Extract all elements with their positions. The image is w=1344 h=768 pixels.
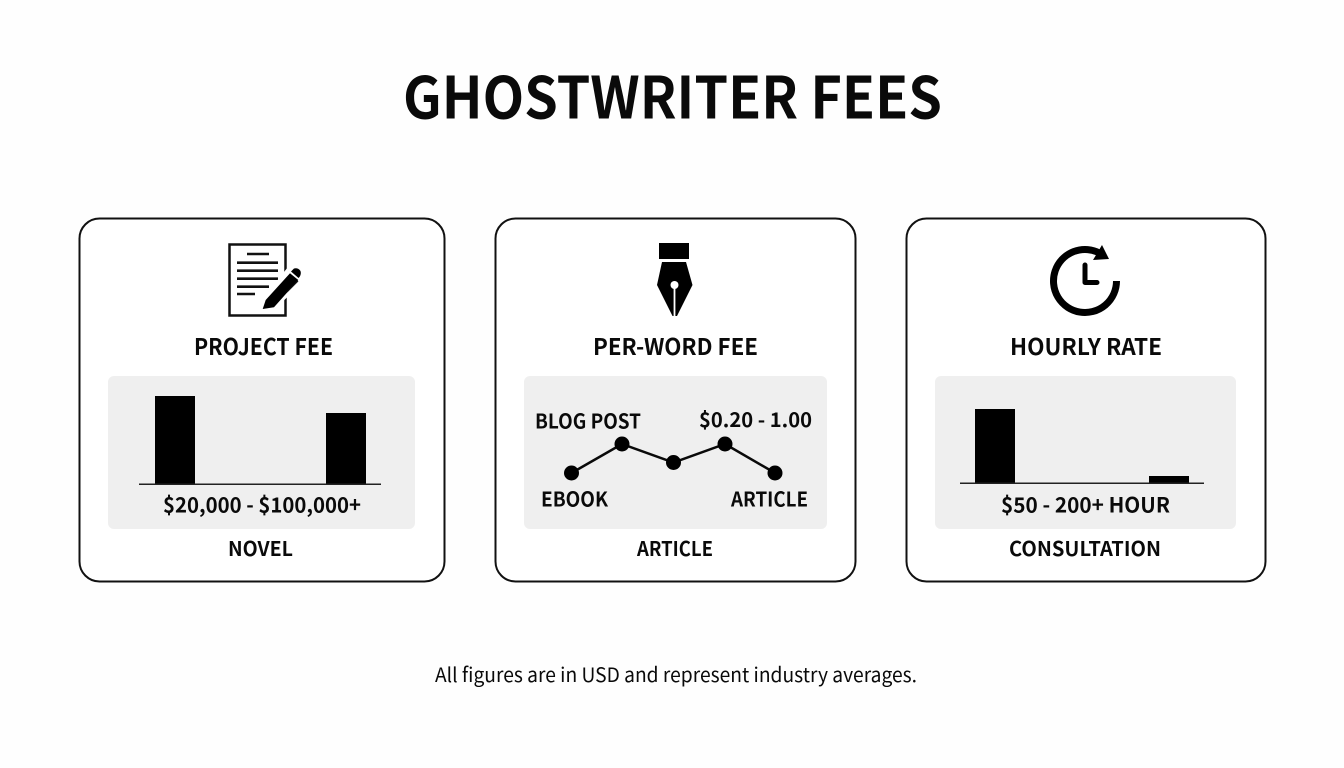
label: article: ARTICLE bbox=[730, 484, 808, 512]
value label: $20,000 - $100,000+ bbox=[163, 490, 361, 520]
chart: per-word line bbox=[524, 376, 827, 529]
panel: hourly rate bbox=[906, 218, 1266, 582]
heading: per-word fee: PER-WORD FEE bbox=[593, 328, 758, 362]
footnote: All figures are in USD and represent industry averages. bbox=[435, 659, 917, 688]
label: price range: $0.20 - 1.00 bbox=[699, 404, 812, 433]
caption: novel: NOVEL bbox=[228, 533, 293, 562]
chart: hourly bars bbox=[935, 376, 1236, 529]
icon: document with pen bbox=[230, 244, 304, 316]
heading: hourly rate: HOURLY RATE bbox=[1010, 328, 1162, 362]
label: blog post: BLOG POST bbox=[535, 406, 641, 434]
panel: per-word fee bbox=[496, 218, 856, 582]
caption: article: ARTICLE bbox=[636, 533, 713, 562]
heading: project fee: PROJECT FEE bbox=[194, 328, 333, 362]
panel: project fee bbox=[80, 218, 444, 582]
label: ebook: EBOOK bbox=[541, 484, 608, 512]
chart: project fee bars bbox=[108, 376, 415, 529]
icon: clock with arrow bbox=[1054, 245, 1116, 312]
icon: fountain pen nib bbox=[657, 243, 692, 317]
value label: $50 - 200+ HOUR bbox=[1001, 490, 1170, 520]
caption: consultation: CONSULTATION bbox=[1009, 533, 1161, 562]
title: GHOSTWRITER FEES bbox=[403, 52, 942, 136]
